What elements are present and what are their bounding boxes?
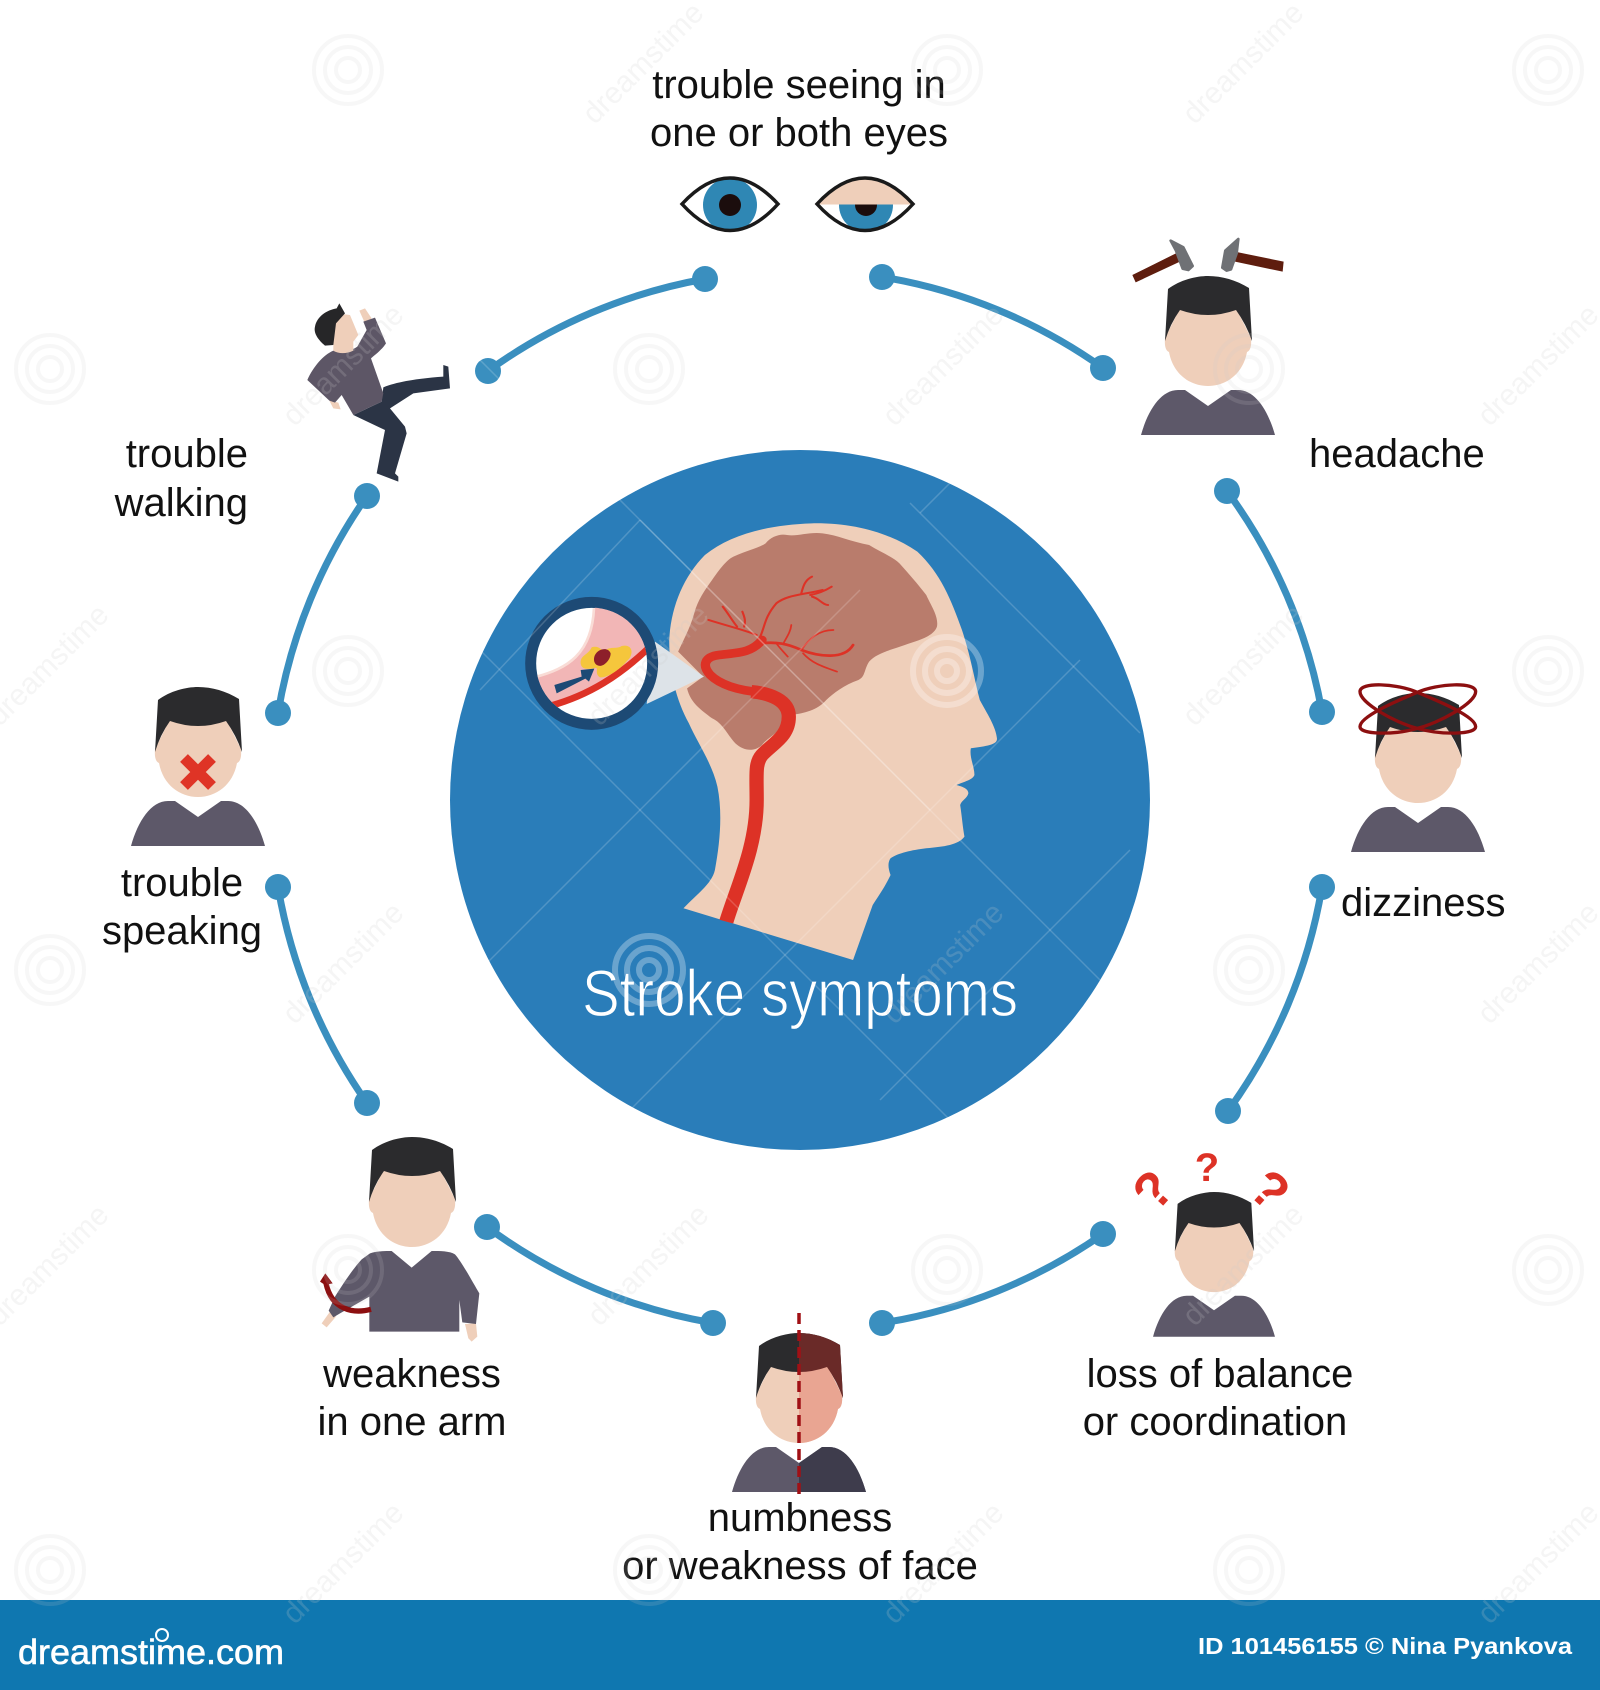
label: weakness in one arm: weakness — [322, 1352, 501, 1396]
label: trouble seeing: one or both eyes — [650, 111, 948, 155]
label: numbness: numbness — [708, 1496, 892, 1540]
label: trouble seeing: trouble seeing in — [652, 63, 946, 107]
text: dreamstime — [276, 1496, 410, 1630]
text: dreamstime — [581, 1198, 715, 1332]
footer logo: dreamstime.com — [18, 1633, 284, 1672]
icon: stumbling man — [307, 303, 450, 482]
artery — [705, 577, 853, 922]
magnifier pointer — [647, 642, 704, 704]
symptom: weakness in one arm — [318, 1137, 506, 1444]
text: dreamstime — [1176, 0, 1310, 130]
label: trouble speaking: speaking — [102, 909, 262, 953]
arc: speaking to walking — [265, 483, 380, 726]
title: Stroke symptoms — [582, 956, 1018, 1030]
icon: person with question marks: ? — [1238, 1159, 1301, 1223]
text: dreamstime — [1176, 598, 1310, 732]
label: dizziness: dizziness — [1341, 881, 1506, 925]
arc: headache to dizziness — [1214, 478, 1335, 725]
icon: drooping eye — [814, 176, 916, 232]
footer bar — [0, 1600, 1600, 1690]
arc: numbness to arm — [474, 1214, 726, 1336]
icon: person with split face — [732, 1313, 866, 1497]
text: dreamstime — [276, 298, 410, 432]
label: weakness in one arm: in one arm — [318, 1400, 506, 1444]
text: dreamstime — [576, 0, 710, 130]
symptom: trouble seeing — [650, 63, 948, 240]
text: dreamstime — [876, 298, 1010, 432]
text: dreamstime — [876, 896, 1010, 1030]
icon: person with question marks: ? — [1122, 1159, 1186, 1222]
arc: walking to seeing — [475, 266, 718, 384]
footer credit: ID 101456155 © Nina Pyankova — [1198, 1633, 1572, 1659]
arc: arm to speaking — [265, 874, 380, 1116]
magnifier lens — [531, 602, 653, 724]
text: dreamstime — [276, 896, 410, 1030]
icon: person with question marks: ? — [1195, 1146, 1219, 1190]
central blue circle — [450, 450, 1150, 1150]
brain — [678, 533, 937, 750]
arc: seeing to headache — [869, 264, 1116, 381]
text: dreamstime — [876, 1496, 1010, 1630]
text: dreamstime — [581, 598, 715, 732]
icon: normal eye — [680, 176, 780, 232]
label: numbness: or weakness of face — [622, 1544, 978, 1588]
magnifier inset: blocked artery — [531, 602, 704, 724]
icon: person with hammers — [1132, 239, 1284, 435]
symptom: numbness of face — [622, 1313, 978, 1588]
icon: person with question marks — [1122, 1146, 1301, 1337]
head profile with brain and artery — [669, 523, 997, 960]
text: dreamstime — [1176, 1198, 1310, 1332]
label: headache: headache — [1309, 432, 1485, 476]
label: trouble walking: walking — [114, 481, 248, 525]
vessel section — [537, 608, 646, 708]
arc: dizziness to balance — [1215, 874, 1335, 1124]
arc: balance to numbness — [869, 1221, 1116, 1336]
ring of connecting arcs — [265, 264, 1335, 1336]
label: trouble walking: trouble — [126, 432, 248, 476]
symptom: headache — [1132, 239, 1485, 476]
head silhouette — [669, 523, 997, 960]
label: loss of balance: loss of balance — [1087, 1352, 1353, 1396]
symptom: loss of balance — [1083, 1146, 1353, 1444]
icon: person with weak arm — [320, 1137, 479, 1342]
label: trouble speaking: trouble — [121, 861, 243, 905]
label: loss of balance: or coordination — [1083, 1400, 1347, 1444]
symptom: trouble speaking — [102, 687, 265, 953]
symptom: dizziness — [1341, 685, 1506, 925]
symptom: trouble walking — [114, 303, 450, 525]
icon: person with crossed mouth — [131, 687, 265, 846]
icon: person with dizzy loops — [1351, 685, 1485, 852]
